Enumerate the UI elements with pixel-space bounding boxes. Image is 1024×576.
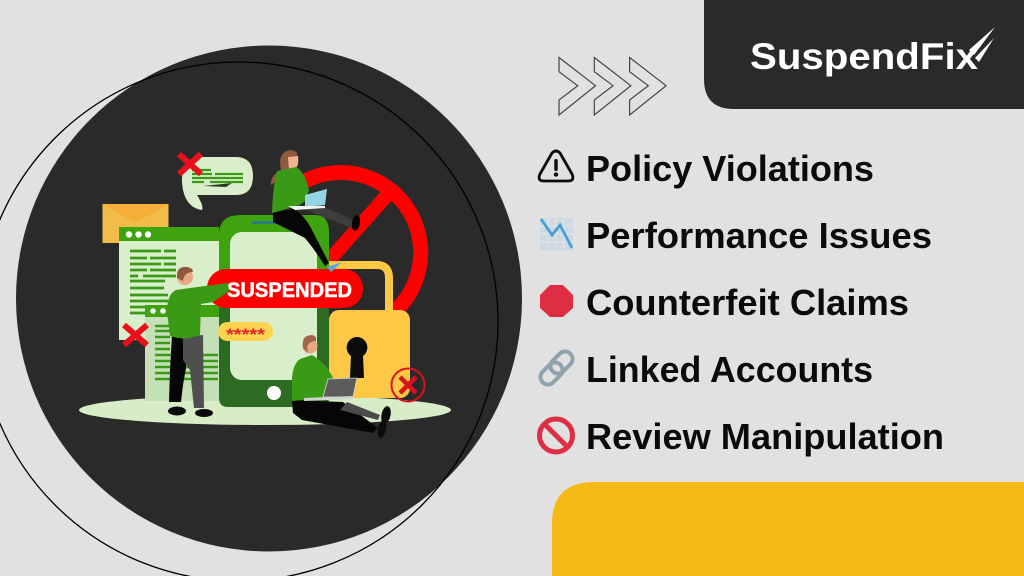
- thin outline circle: [0, 62, 498, 576]
- browser window document: [119, 227, 220, 340]
- speech bubble with error: [179, 154, 253, 210]
- man sitting with laptop: [292, 335, 392, 439]
- list item: review manipulation: Review Manipulation: [586, 416, 944, 457]
- password pill: [218, 322, 273, 344]
- list item: counterfeit claims: Counterfeit Claims: [586, 282, 909, 323]
- icon: prohibited sign: [540, 419, 572, 452]
- envelope icon: [102, 204, 168, 243]
- logo check marks: [969, 27, 995, 62]
- icon: chain link: [537, 348, 576, 388]
- illustration: account suspended scene: [79, 150, 451, 439]
- dark background circle: [16, 46, 522, 552]
- lower document panel: [145, 317, 219, 401]
- list item: performance issues: Performance Issues: [586, 215, 932, 256]
- decorative chevron arrows: [559, 58, 666, 115]
- woman sitting with laptop: [271, 150, 361, 272]
- suspended banner: SUSPENDED: [227, 279, 352, 302]
- suspended banner: [207, 269, 363, 308]
- icon: warning triangle: [539, 151, 573, 181]
- logo wordmark: SuspendFix: [750, 36, 978, 77]
- red cross on document: [124, 325, 147, 345]
- password pill: *****: [226, 325, 265, 344]
- padlock: [329, 265, 410, 398]
- icon: stop octagon: [540, 285, 573, 317]
- list item: policy violations: Policy Violations: [586, 148, 874, 189]
- tablet device: [219, 215, 329, 407]
- red circled cross badge: [392, 368, 424, 402]
- list item: linked accounts: Linked Accounts: [586, 349, 873, 390]
- prohibition sign: [303, 173, 421, 327]
- logo panel: [704, 0, 1024, 109]
- yellow corner block: [552, 482, 1024, 576]
- floor ellipse: [79, 395, 451, 425]
- icon: falling chart: [540, 218, 573, 250]
- man standing: [167, 267, 229, 417]
